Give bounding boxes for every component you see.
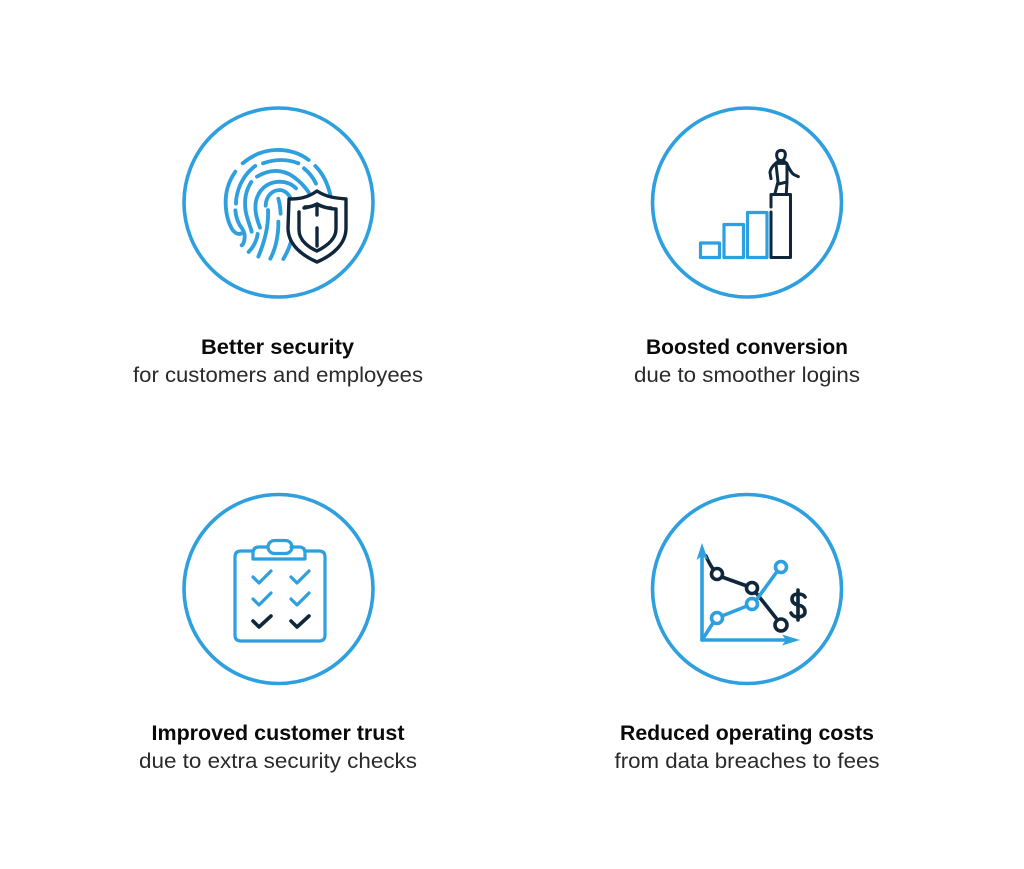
icon: clipboard (235, 540, 325, 641)
icon: line chart with dollar (696, 543, 805, 646)
subtext: improved customer trust: due to extra security checks (139, 750, 417, 773)
icon: shield (288, 191, 346, 262)
icon: rising bars with person (700, 150, 798, 258)
icon: tall dark bar (771, 194, 790, 258)
icon circle: improved customer trust (184, 494, 373, 684)
icon: dark nodes (712, 568, 787, 631)
icon: dollar sign (791, 590, 805, 620)
icon: dark checks (253, 616, 309, 627)
subtext: boosted conversion: due to smoother logins (634, 364, 860, 387)
icon circle: better security (184, 108, 373, 297)
subtext: reduced operating costs: from data breaches to fees (614, 750, 880, 773)
panel: improved customer trust (139, 494, 417, 773)
panel: better security (133, 108, 423, 387)
icon: person (770, 150, 798, 193)
icon: blue nodes (712, 562, 786, 624)
icon: fingerprint (226, 150, 330, 259)
icon: blue rising line (702, 573, 776, 640)
icon: blue bars (700, 212, 767, 258)
heading: improved customer trust: Improved customer trust (152, 722, 405, 745)
subtext: better security: for customers and employees (133, 364, 423, 387)
heading: reduced operating costs: Reduced operating costs (620, 722, 874, 745)
icon: fingerprint with shield (226, 150, 346, 262)
icon: dark falling line (706, 556, 776, 618)
panel: boosted conversion (634, 108, 860, 387)
panel: reduced operating costs (614, 494, 880, 773)
icon: chart axes (696, 543, 800, 646)
icon circle: reduced operating costs (652, 494, 842, 684)
icon circle: boosted conversion (652, 108, 842, 297)
icon: clipboard checklist (235, 540, 325, 641)
icon: blue checks (253, 571, 309, 605)
heading: better security: Better security (201, 336, 354, 359)
heading: boosted conversion: Boosted conversion (646, 336, 848, 359)
